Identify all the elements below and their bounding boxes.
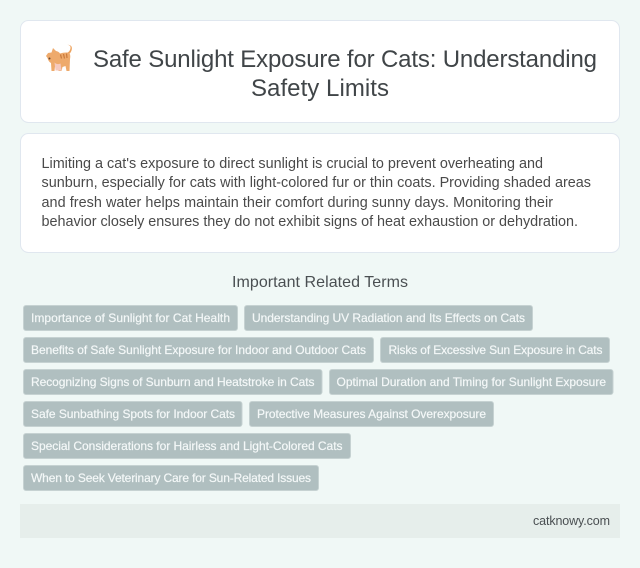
tag: recognizing signs: Recognizing Signs of Sunburn and Heatstroke in Cats	[31, 375, 314, 389]
tag: risks	[380, 338, 610, 362]
tag: veterinary care	[24, 466, 318, 490]
description text: sunburn, especially for cats with light-colored fur or thin coats. Providing shaded areas	[42, 175, 591, 191]
heading: important related terms: Important Related Terms	[232, 274, 408, 291]
tag: special considerations: Special Considerations for Hairless and Light-Colored Cats	[31, 439, 342, 453]
tag: protective measures	[250, 402, 494, 426]
tag: special considerations	[24, 434, 350, 458]
tag: sunbathing spots	[24, 402, 242, 426]
tag: protective measures: Protective Measures Against Overexposure	[257, 407, 486, 421]
tag: importance of sunlight: Importance of Sunlight for Cat Health	[31, 311, 230, 325]
tag: recognizing signs	[24, 370, 322, 394]
panel: description card	[20, 134, 620, 252]
tag: optimal duration	[330, 370, 613, 394]
tag: understanding UV: Understanding UV Radiation and Its Effects on Cats	[252, 311, 525, 325]
description text: behavior closely ensures they do not exhibit signs of heat exhaustion or dehydration.	[42, 214, 578, 230]
icon: cat	[46, 45, 72, 71]
panel: title card	[20, 20, 620, 122]
title: Safe Sunlight Exposure for Cats: Understanding	[93, 46, 597, 73]
description text	[42, 156, 591, 230]
tag: sunbathing spots: Safe Sunbathing Spots for Indoor Cats	[31, 407, 235, 421]
description text: and fresh water helps maintain their comfort during sunny days. Monitoring their	[42, 195, 553, 211]
tag: optimal duration: Optimal Duration and Timing for Sunlight Exposure	[336, 375, 606, 389]
footer: catknowy.com	[533, 514, 610, 528]
title	[93, 46, 597, 102]
tag: benefits: Benefits of Safe Sunlight Exposure for Indoor and Outdoor Cats	[31, 343, 366, 357]
tag: veterinary care: When to Seek Veterinary Care for Sun-Related Issues	[31, 471, 311, 485]
tag: understanding UV	[244, 306, 532, 330]
footer	[20, 504, 620, 538]
tag: benefits	[24, 338, 374, 362]
description text: Limiting a cat's exposure to direct sunlight is crucial to prevent overheating and	[42, 156, 543, 172]
tag list	[24, 306, 613, 490]
title: Safety Limits	[251, 75, 389, 102]
tag: risks: Risks of Excessive Sun Exposure in Cats	[388, 343, 602, 357]
tag: importance of sunlight	[24, 306, 238, 330]
